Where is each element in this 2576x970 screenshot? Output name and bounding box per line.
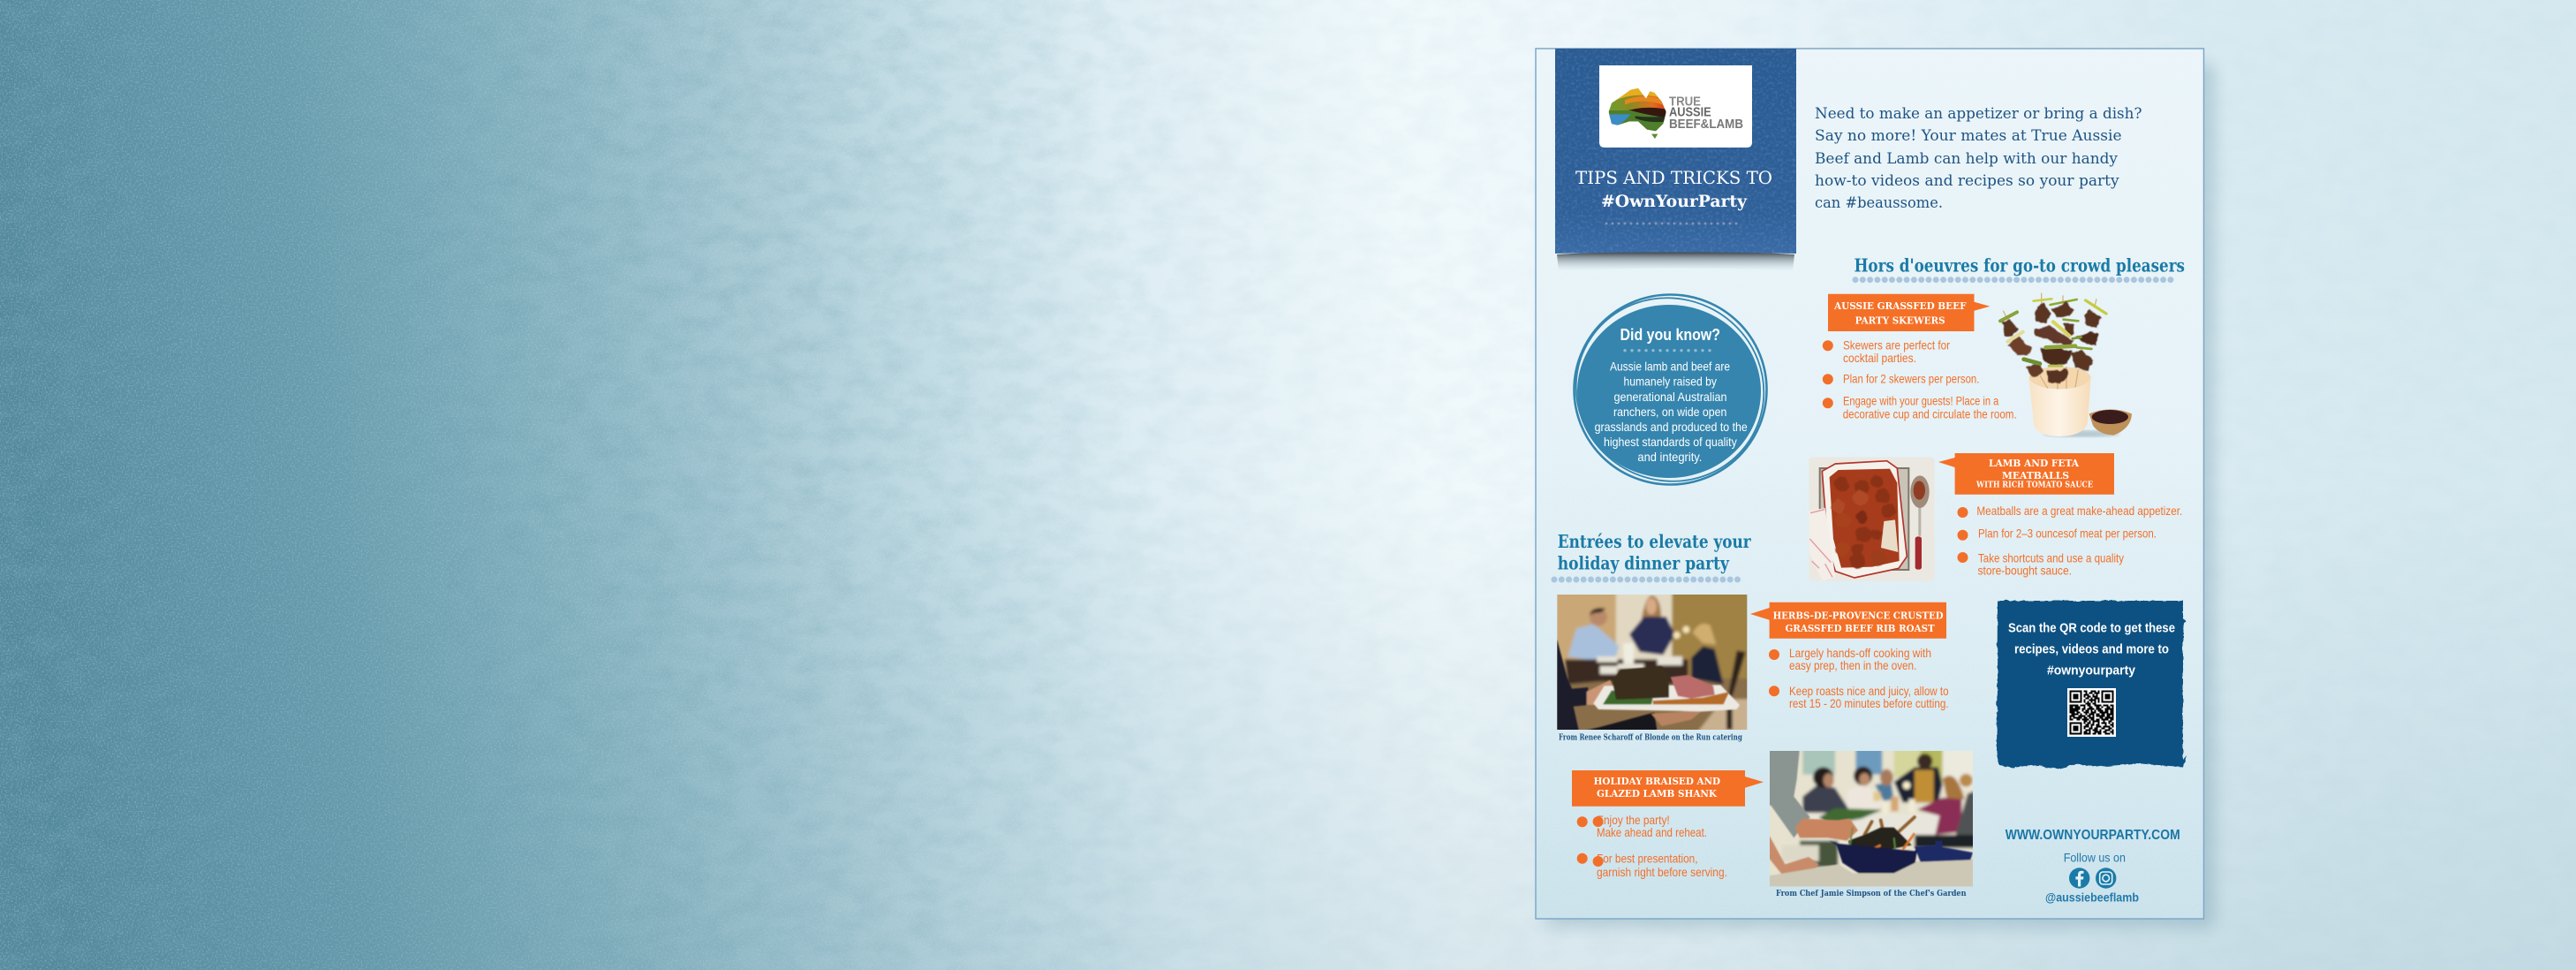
logo wordmark: AUSSIE xyxy=(1669,105,1711,120)
lamb shank tips: garnish right before serving. xyxy=(1597,865,1727,879)
rib roast tips: easy prep, then in the oven. xyxy=(1789,658,1916,672)
skewers tips: Engage with your guests! Place in a xyxy=(1843,394,1998,408)
top banner xyxy=(1555,49,1796,271)
did you know circle: Did you know? xyxy=(1620,326,1720,344)
callout: meatballs: WITH RICH TOMATO SAUCE xyxy=(1975,481,2093,490)
footer xyxy=(2006,828,2180,905)
rib roast tips: Keep roasts nice and juicy, allow to xyxy=(1789,684,1949,698)
callout: rib roast: HERBS-DE-PROVENCE CRUSTED xyxy=(1773,610,1944,622)
lamb shank tips: Enjoy the party! xyxy=(1597,813,1670,827)
heading: entrees: holiday dinner party xyxy=(1558,552,1730,573)
did you know circle: humanely raised by xyxy=(1623,375,1717,389)
skewers tips: Plan for 2 skewers per person. xyxy=(1843,372,1979,386)
QR panel: Scan the QR code to get these xyxy=(2008,622,2175,636)
callout: skewers xyxy=(1828,294,1990,331)
photo: chef with lamb shank pot xyxy=(1767,748,1975,890)
intro text: can #beaussome. xyxy=(1815,194,1943,212)
logo wordmark xyxy=(1669,94,1743,132)
banner curl shadow xyxy=(1557,251,1794,271)
meatballs tips: Take shortcuts and use a quality xyxy=(1978,551,2124,565)
meatballs tips: Meatballs are a great make-ahead appetizer. xyxy=(1976,504,2182,518)
lamb shank tips: Make ahead and reheat. xyxy=(1597,825,1707,839)
poster panel xyxy=(1536,49,2204,919)
rib roast tips: Largely hands-off cooking with xyxy=(1789,646,1931,660)
heading: entrees: Entrées to elevate your xyxy=(1558,531,1752,552)
lamb shank tips xyxy=(1577,813,1727,879)
heading: hors d'oeuvres: Hors d'oeuvres for go-to crowd pleasers xyxy=(1855,255,2185,277)
callout: meatballs xyxy=(1938,453,2114,495)
did you know circle: ranchers, on wide open xyxy=(1613,405,1726,419)
did you know circle: grasslands and produced to the xyxy=(1595,420,1748,434)
logo wordmark: TRUE xyxy=(1669,94,1701,110)
callout: rib roast: GRASSFED BEEF RIB ROAST xyxy=(1786,622,1935,634)
logo mark: Australia xyxy=(1607,87,1669,139)
callout: skewers: AUSSIE GRASSFED BEEF xyxy=(1833,299,1967,312)
callout: rib roast xyxy=(1750,602,1946,639)
meatballs tips: store-bought sauce. xyxy=(1978,564,2072,578)
banner ribbon xyxy=(1555,49,1796,254)
banner title: #OwnYourParty xyxy=(1601,193,1748,211)
website: WWW.OWNYOURPARTY.COM xyxy=(2006,828,2180,843)
skewers tips: Skewers are perfect for xyxy=(1843,338,1950,352)
did you know circle: generational Australian xyxy=(1614,390,1727,404)
callout: meatballs: MEATBALLS xyxy=(2002,469,2069,481)
meatballs tips xyxy=(1957,504,2182,578)
intro text xyxy=(1815,105,2142,212)
callout: meatballs: LAMB AND FETA xyxy=(1989,457,2080,469)
banner title xyxy=(1575,167,1772,211)
intro text: Say no more! Your mates at True Aussie xyxy=(1815,127,2122,145)
logo wordmark: BEEF&LAMB xyxy=(1669,117,1743,132)
photo: dinner party with rib roast xyxy=(1554,592,1750,732)
recipe: skewers xyxy=(1823,293,2132,437)
recipe: lamb shank xyxy=(1572,748,1975,898)
skewers tips xyxy=(1823,338,2017,421)
photo: meatballs dish xyxy=(1809,457,1935,581)
QR code xyxy=(2067,688,2116,737)
follow us: Follow us on xyxy=(2064,852,2126,865)
intro text: Need to make an appetizer or bring a dish? xyxy=(1815,105,2142,123)
did you know circle: Aussie lamb and beef are xyxy=(1610,359,1730,373)
intro text: Beef and Lamb can help with our handy xyxy=(1815,150,2118,168)
rib roast tips: rest 15 - 20 minutes before cutting. xyxy=(1789,696,1949,710)
icon: facebook xyxy=(2069,868,2089,889)
meatballs tips: Plan for 2–3 ouncesof meat per person. xyxy=(1978,527,2157,541)
callout: skewers: PARTY SKEWERS xyxy=(1855,314,1945,327)
callout: lamb shank: GLAZED LAMB SHANK xyxy=(1597,787,1718,799)
caption: From Chef Jamie Simpson of the Chef's Garden xyxy=(1776,890,1967,898)
intro text: how-to videos and recipes so your party xyxy=(1815,172,2119,190)
QR panel: recipes, videos and more to xyxy=(2014,642,2169,656)
icon: instagram xyxy=(2096,868,2116,889)
QR panel xyxy=(1997,601,2187,769)
did you know circle: and integrity. xyxy=(1637,450,1702,464)
recipe: rib roast xyxy=(1554,592,1949,743)
logo card xyxy=(1599,65,1752,148)
QR panel: #ownyourparty xyxy=(2047,663,2135,678)
recipe: meatballs xyxy=(1809,453,2182,581)
panel shadow xyxy=(1547,64,2215,928)
skewers tips: decorative cup and circulate the room. xyxy=(1843,407,2017,421)
handle: @aussiebeeflamb xyxy=(2045,891,2139,905)
rib roast tips xyxy=(1769,646,1949,710)
skewers tips: cocktail parties. xyxy=(1843,351,1916,365)
callout: lamb shank: HOLIDAY BRAISED AND xyxy=(1594,775,1720,787)
did you know circle: highest standards of quality xyxy=(1604,435,1737,449)
callout: lamb shank xyxy=(1572,770,1764,807)
lamb shank tips: For best presentation, xyxy=(1597,852,1697,866)
photo: skewers in cup xyxy=(2000,293,2132,437)
heading: entrees xyxy=(1554,531,1752,580)
banner title: TIPS AND TRICKS TO xyxy=(1575,167,1772,188)
did you know circle xyxy=(1545,267,1794,512)
caption: From Renee Scharoff of Blonde on the Run catering xyxy=(1559,734,1742,743)
